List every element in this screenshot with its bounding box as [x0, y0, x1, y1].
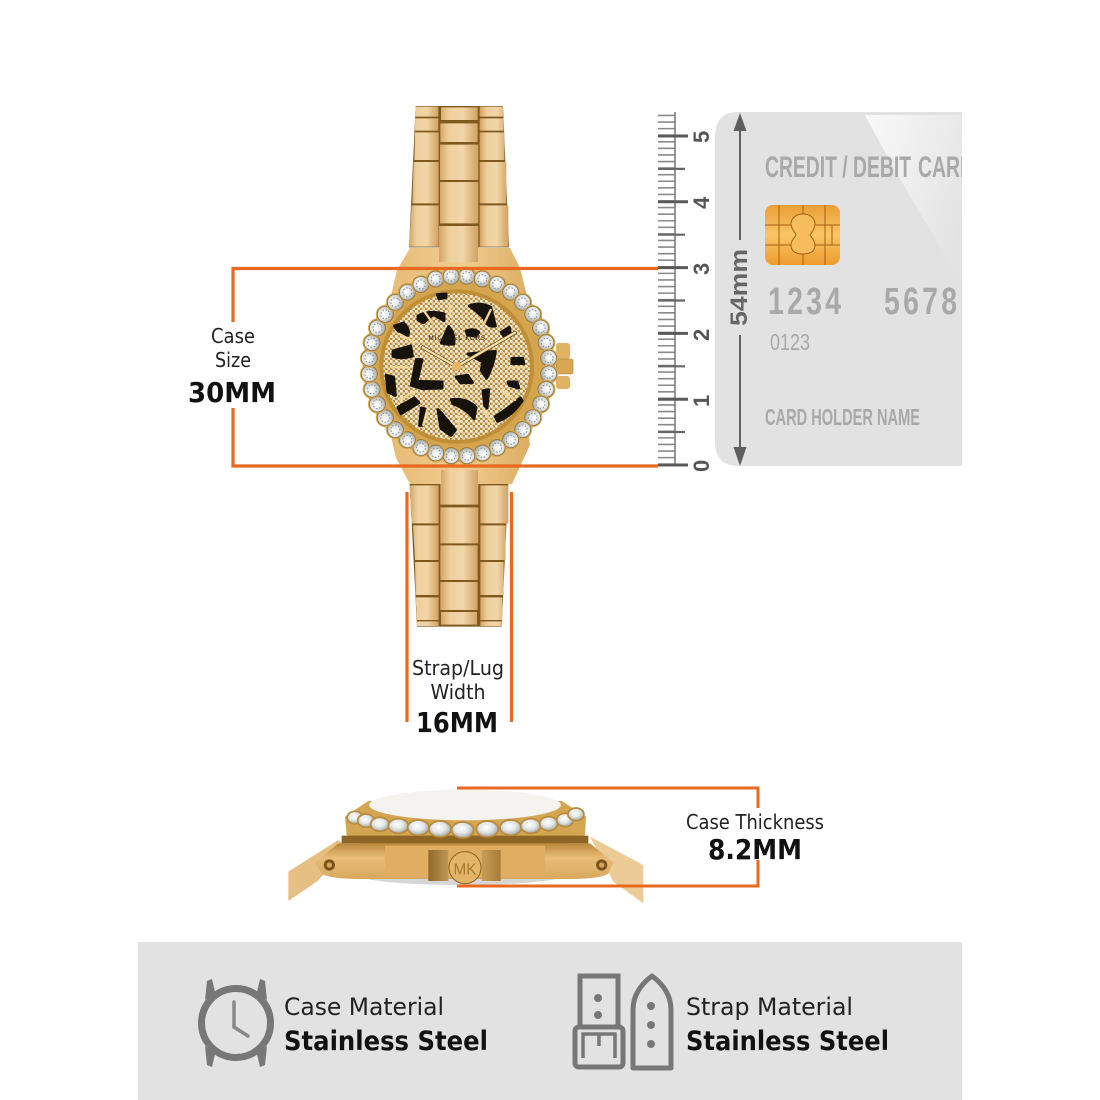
ruler numbers [689, 131, 714, 472]
card text: CREDIT / DEBIT [765, 151, 911, 184]
brand wordmark: MICHAEL KORS [428, 335, 485, 342]
card glare [865, 115, 962, 282]
label: case thickness: Case Thickness [686, 810, 824, 834]
label: strap width: Width [430, 680, 486, 704]
bezel ring [363, 270, 555, 462]
label: case size: Case [211, 324, 255, 348]
hour markers [392, 305, 525, 432]
card text: CARD HOLDER NAME [765, 404, 920, 430]
side view of watch [288, 790, 643, 903]
card text: 1234 [768, 281, 844, 323]
hands [423, 333, 515, 367]
crown [449, 852, 481, 884]
bezel side [345, 801, 586, 843]
dial [379, 289, 534, 444]
label: case size: 30MM [188, 376, 276, 409]
watch case and dial [359, 248, 573, 484]
label: case size: Size [215, 348, 251, 372]
pin right [596, 859, 607, 871]
panel: materials [138, 942, 962, 1100]
icon: strap [575, 976, 671, 1068]
text: case material [284, 993, 488, 1057]
credit card [715, 112, 974, 466]
card text [765, 151, 974, 430]
label: strap width: 16MM [416, 706, 498, 739]
leopard pattern [386, 294, 524, 435]
crown guards [428, 850, 501, 881]
label: strap width: Strap/Lug [412, 656, 504, 680]
orange lines: case thickness [457, 788, 758, 886]
ruler numbers: 1 [689, 395, 714, 407]
ruler numbers: 0 [689, 460, 714, 472]
text: case material: Stainless Steel [284, 1026, 488, 1057]
ruler numbers: 2 [689, 329, 714, 341]
case body [315, 843, 613, 879]
sapphire top [369, 790, 561, 820]
bracelet: lower [410, 469, 508, 627]
card text: 0123 [770, 329, 810, 355]
card text: 5678 [884, 281, 960, 323]
left bracelet [288, 840, 345, 901]
orange lines: strap width [407, 492, 512, 722]
bezel stones [359, 266, 559, 466]
text: strap material: Stainless Steel [686, 1026, 889, 1057]
pin left [324, 859, 335, 871]
label: case thickness: 8.2MM [708, 833, 802, 866]
label: case size [188, 324, 276, 409]
icon: watch [202, 979, 270, 1067]
case back [358, 865, 565, 885]
side stones [347, 808, 584, 838]
crown [556, 343, 573, 389]
ruler [658, 112, 714, 472]
text: strap material [686, 993, 889, 1057]
54mm arrow [726, 113, 753, 466]
label: case thickness [686, 810, 824, 866]
text: case material: Case Material [284, 993, 444, 1021]
card chip [765, 205, 840, 265]
54mm arrow: 54mm [726, 249, 753, 326]
case lugs [390, 248, 530, 484]
card text: CARD [918, 151, 974, 184]
ruler numbers: 4 [689, 196, 714, 209]
ruler numbers: 3 [689, 263, 714, 275]
bracelet: upper [409, 106, 509, 263]
orange lines: case size [233, 268, 658, 466]
right bracelet [590, 837, 643, 903]
text: strap material: Strap Material [686, 993, 853, 1021]
label: strap width [412, 656, 504, 739]
ruler numbers: 5 [689, 131, 714, 143]
crown: MK [453, 861, 477, 878]
